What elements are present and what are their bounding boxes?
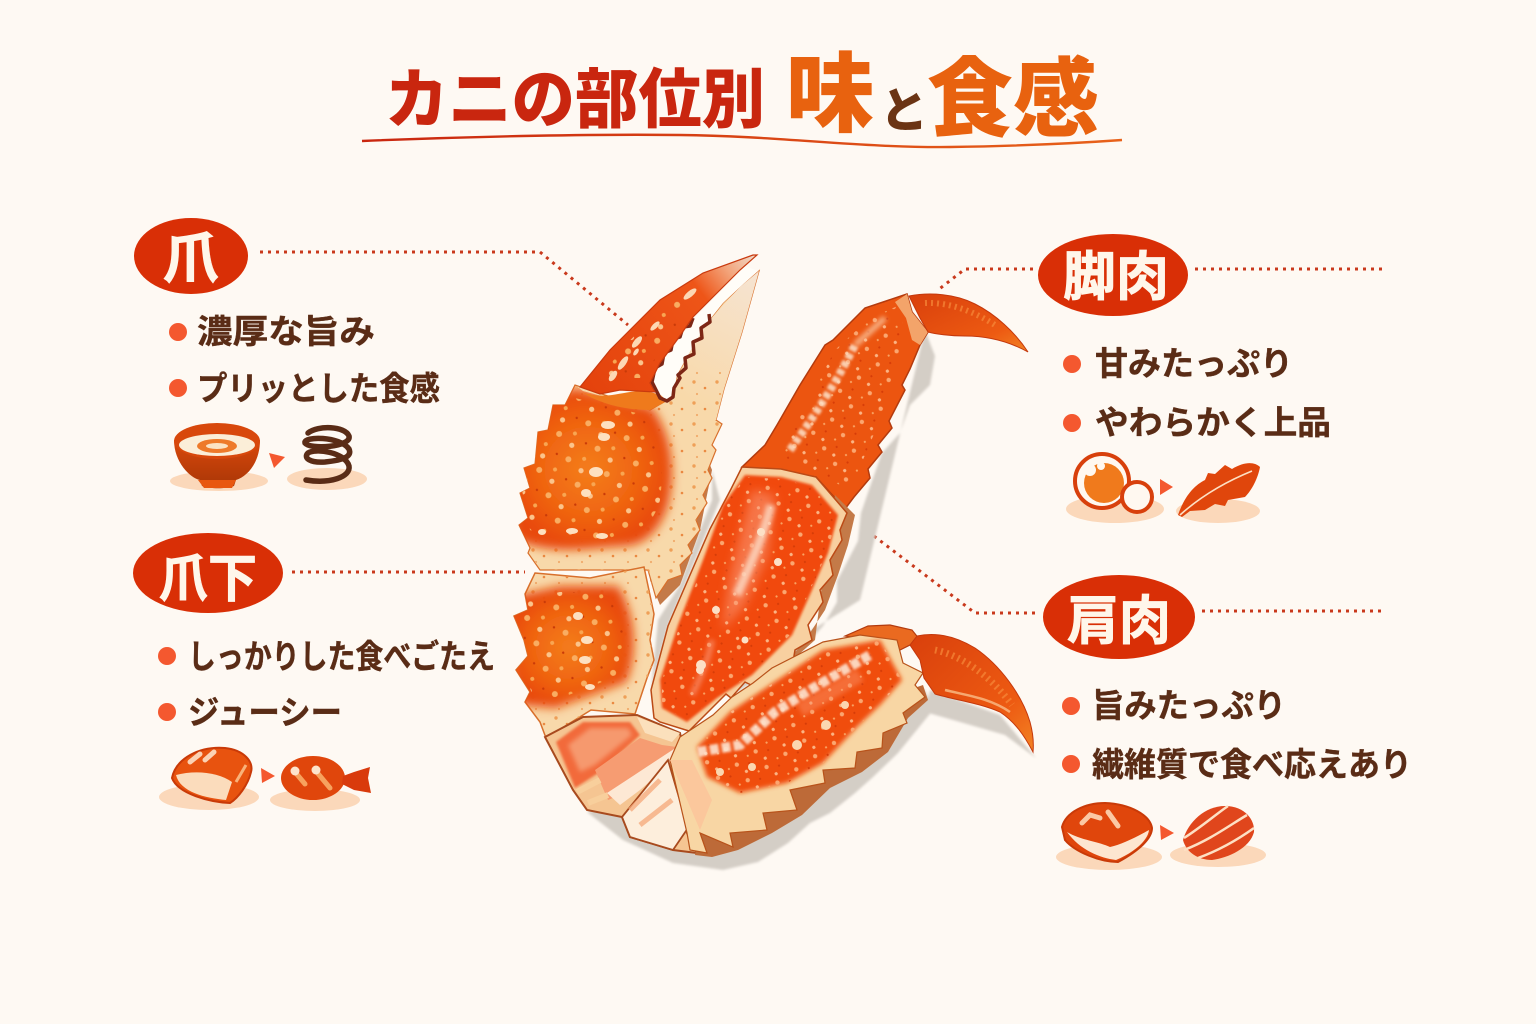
icon: soup bowl [170, 423, 268, 491]
heading badge: 爪下 [133, 533, 283, 613]
icon: feather [1176, 463, 1260, 523]
crab: base joints [545, 715, 697, 853]
bullet: しっかりした食べごたえ: しっかりした食べごたえ [188, 638, 495, 675]
title: と: と [880, 85, 928, 138]
panel: 肩肉 [1043, 575, 1412, 870]
leader lines [260, 252, 1385, 613]
heading badge: 爪: 爪 [163, 227, 219, 290]
crab: long middle leg segment [651, 467, 855, 731]
claw movable finger [580, 255, 757, 394]
crab: lower claw segment [513, 566, 655, 736]
title: 味: 味 [786, 45, 874, 144]
bullet: 濃厚な旨み: 濃厚な旨み [197, 313, 375, 350]
crab: pincer claw [505, 255, 759, 610]
arrow: bubbles to feather [1160, 479, 1173, 495]
title: カニの部位別: カニの部位別 [385, 63, 765, 136]
bullet: プリッとした食感: プリッとした食感 [197, 370, 440, 407]
crab: upper leg segment [742, 294, 928, 509]
claw palm and fixed finger [505, 271, 759, 610]
bullet: やわらかく上品: やわらかく上品 [1095, 404, 1331, 441]
heading badge: 肩肉: 肩肉 [1067, 592, 1171, 651]
icon: spring coil [287, 428, 367, 490]
bullet: 甘みたっぷり: 甘みたっぷり [1095, 345, 1293, 382]
illustration: crab leg and claw [505, 255, 1036, 870]
title: 食感: 食感 [927, 52, 1099, 148]
lower leg dark underside [695, 685, 928, 857]
heading badge: 爪下: 爪下 [159, 551, 257, 609]
icon: juicy candy [270, 756, 371, 811]
icon: cut crab meat [159, 748, 259, 810]
lower leg shell [670, 635, 925, 853]
lower leg top ridge [845, 625, 920, 650]
crab: lower leg tip [910, 634, 1033, 752]
title [362, 45, 1122, 148]
panel: 爪 [134, 218, 440, 491]
title underline [362, 135, 1122, 147]
bullet: 繊維質で食べ応えあり: 繊維質で食べ応えあり [1092, 746, 1412, 783]
bullet: 旨みたっぷり: 旨みたっぷり [1092, 687, 1286, 724]
panel: 脚肉 [1038, 234, 1331, 523]
arrow: meat to candy [261, 768, 275, 783]
heading badge: 脚肉 [1038, 234, 1188, 316]
claw teeth gap [650, 266, 758, 401]
crab drop shadow [587, 330, 1036, 870]
arrow: meat to fibers [1160, 825, 1174, 840]
bullet: ジューシー: ジューシー [188, 694, 342, 731]
heading badge: 爪 [134, 218, 248, 294]
arrow: bowl to spring [269, 453, 285, 468]
crab: lower leg segment [670, 625, 928, 857]
crab: upper leg tip [909, 294, 1028, 352]
heading badge: 肩肉 [1043, 575, 1195, 659]
icon: roe bubbles [1066, 454, 1164, 523]
panel: 爪下 [133, 533, 495, 811]
heading badge: 脚肉: 脚肉 [1063, 248, 1169, 307]
icon: fibrous meat slice [1170, 806, 1266, 867]
icon: shoulder meat chunk [1056, 803, 1162, 870]
